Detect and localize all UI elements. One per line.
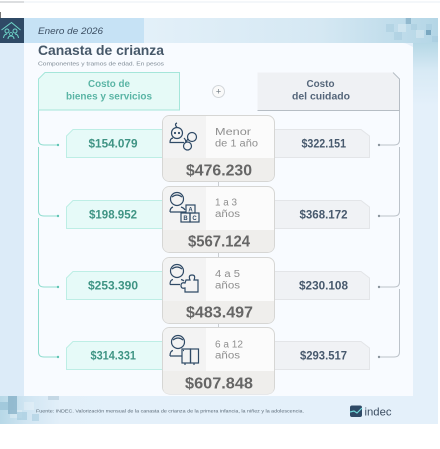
- card 1: [162, 116, 274, 182]
- icon: house with family: [0, 18, 24, 43]
- logo: indec: indec: [364, 406, 392, 418]
- cuidado value 1: $322.151: [302, 138, 347, 150]
- bienes value 1: $154.079: [88, 138, 138, 150]
- date bar: Enero de 2026: [38, 26, 103, 36]
- card 3: $483.497: [186, 304, 253, 322]
- card 3: 4 a 5: [215, 269, 240, 280]
- card 3: años: [215, 280, 240, 292]
- date bar: [24, 18, 144, 43]
- icon: child with blocks: A: [188, 208, 193, 214]
- card 2: 1 a 3: [215, 198, 237, 208]
- cuidado value 2: $368.172: [300, 210, 348, 222]
- icon: child with book: [170, 336, 198, 365]
- header: costo del cuidado: del cuidado: [292, 92, 350, 102]
- cuidado value 4: [272, 342, 370, 370]
- card 4: [162, 328, 274, 394]
- cuidado value 2: [272, 200, 370, 228]
- cuidado value 1: [272, 130, 370, 158]
- card 4: años: [215, 350, 240, 362]
- icon: child with blocks: B: [183, 216, 188, 222]
- main panel: [24, 43, 413, 396]
- cuidado value 3: $230.108: [299, 280, 349, 292]
- card 4: 6 a 12: [215, 340, 243, 350]
- subtitle: Componentes y tramos de edad. En pesos: [38, 62, 164, 68]
- bienes value 3: [66, 272, 166, 300]
- card 2: $567.124: [188, 234, 250, 250]
- bienes value 2: $198.952: [89, 210, 137, 222]
- header: costo del cuidado: [258, 72, 400, 110]
- row 2: 1 a 3 años: [66, 186, 370, 252]
- row 4: 6 a 12 años: [66, 328, 370, 394]
- card 3: [162, 258, 274, 324]
- row 1: menor de 1 año: [66, 116, 370, 182]
- header: costo de bienes y servicios: Costo de: [88, 79, 131, 90]
- plus icon: +: [216, 86, 221, 96]
- header: costo de bienes y servicios: bienes y servicios: [66, 92, 153, 102]
- card 1: de 1 año: [215, 138, 258, 150]
- card 1: $476.230: [186, 162, 252, 180]
- card 4: $607.848: [185, 376, 253, 392]
- bienes value 4: $314.331: [90, 350, 137, 362]
- bienes value 2: [66, 200, 166, 228]
- bienes value 4: [66, 342, 166, 370]
- center connector lines: [218, 181, 220, 328]
- card 2: [162, 186, 274, 252]
- bienes value 1: [66, 130, 166, 158]
- icon: child with puzzle: [170, 264, 198, 292]
- bienes value 3: $253.390: [88, 280, 138, 292]
- logo: indec: [350, 406, 392, 418]
- header: costo de bienes y servicios: [38, 72, 180, 110]
- row 3: 4 a 5 años: [66, 258, 370, 324]
- left bracket lines: [38, 110, 59, 358]
- plus icon: [212, 86, 224, 98]
- header: costo del cuidado: Costo: [306, 79, 335, 90]
- source note: Fuente: INDEC. Valorización mensual de la canasta de crianza de la primera infancia, la niñez y la adolescencia.: [36, 408, 304, 414]
- title: Canasta de crianza: [38, 43, 164, 58]
- icon: baby with pacifier: [170, 123, 196, 150]
- icon: child with blocks: [170, 192, 199, 222]
- right bracket lines: [378, 110, 400, 358]
- cuidado value 3: [272, 272, 370, 300]
- cuidado value 4: $293.517: [300, 350, 347, 362]
- card 2: años: [215, 209, 240, 220]
- icon: child with blocks: C: [192, 216, 197, 222]
- card 1: Menor: [215, 127, 252, 138]
